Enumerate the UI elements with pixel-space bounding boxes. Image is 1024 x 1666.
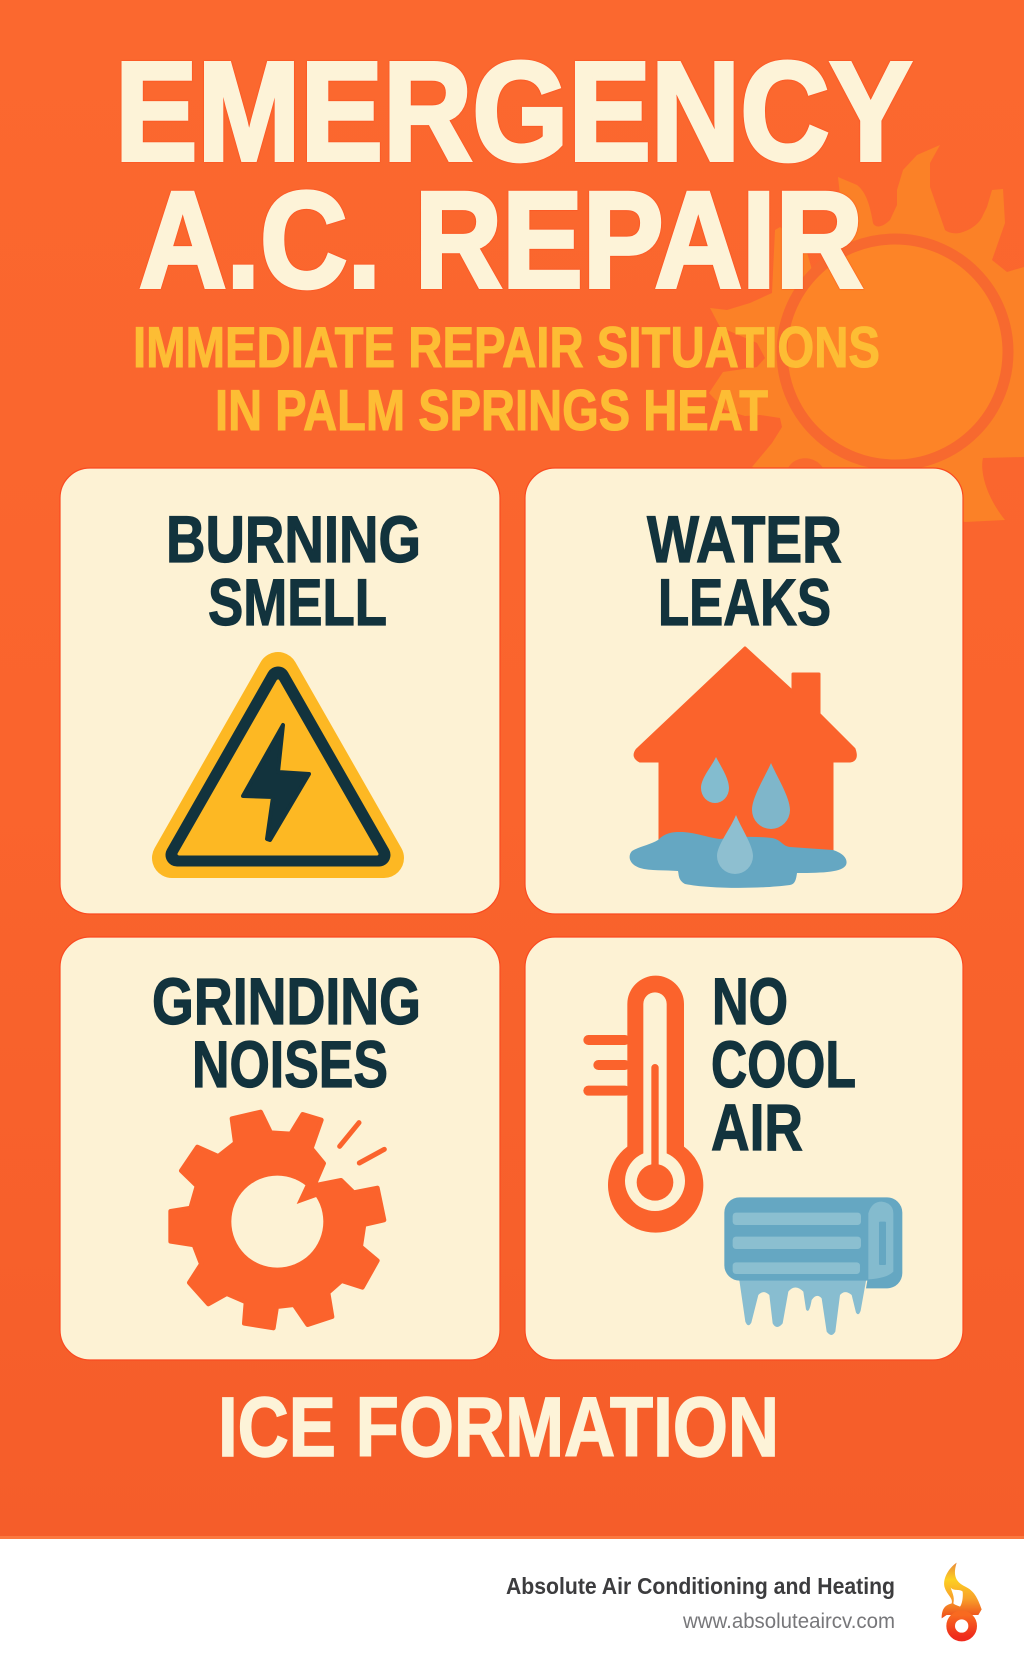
- heading: water leaks: [647, 503, 842, 639]
- icon: leaking house with puddle: [630, 648, 855, 888]
- icon: warning triangle with lightning bolt: [172, 672, 384, 858]
- heading: burning smell: BURNING: [166, 503, 421, 576]
- heading: water leaks: WATER: [647, 503, 842, 576]
- heading: water leaks: LEAKS: [658, 566, 831, 639]
- website: www.absoluteaircv.com: [682, 1610, 895, 1633]
- heading: grinding noises: GRINDING: [152, 965, 421, 1038]
- title: A.C. REPAIR: [139, 164, 863, 317]
- title: [115, 32, 912, 317]
- subtitle: [133, 316, 880, 443]
- heading: no cool air: [711, 965, 856, 1164]
- icon: frozen air conditioner with icicles: [724, 1197, 902, 1335]
- heading: no cool air: AIR: [711, 1091, 803, 1164]
- heading: no cool air: NO: [712, 965, 788, 1038]
- subtitle: IN PALM SPRINGS HEAT: [215, 379, 768, 443]
- panel: burning smell: [60, 468, 500, 914]
- sun illustration: [709, 145, 1024, 522]
- heading: burning smell: SMELL: [208, 566, 387, 639]
- company name text: Absolute Air Conditioning and Heating: [506, 1573, 895, 1599]
- heading: no cool air: COOL: [711, 1028, 856, 1101]
- heading: grinding noises: NOISES: [192, 1028, 388, 1101]
- logo: flame and ring: [942, 1563, 982, 1637]
- footer: [0, 1536, 1024, 1666]
- title: EMERGENCY: [115, 32, 912, 190]
- panel: no cool air: [525, 937, 963, 1360]
- heading: burning smell: [166, 503, 421, 639]
- panel: grinding noises: [60, 937, 500, 1360]
- icon: cracked gear with sparks: [171, 1112, 384, 1328]
- panel: water leaks: [525, 468, 963, 914]
- heading: grinding noises: [152, 965, 421, 1101]
- icon: thermometer: [583, 976, 703, 1233]
- caption: ice formation: ICE FORMATION: [218, 1380, 779, 1474]
- subtitle: IMMEDIATE REPAIR SITUATIONS: [133, 316, 880, 380]
